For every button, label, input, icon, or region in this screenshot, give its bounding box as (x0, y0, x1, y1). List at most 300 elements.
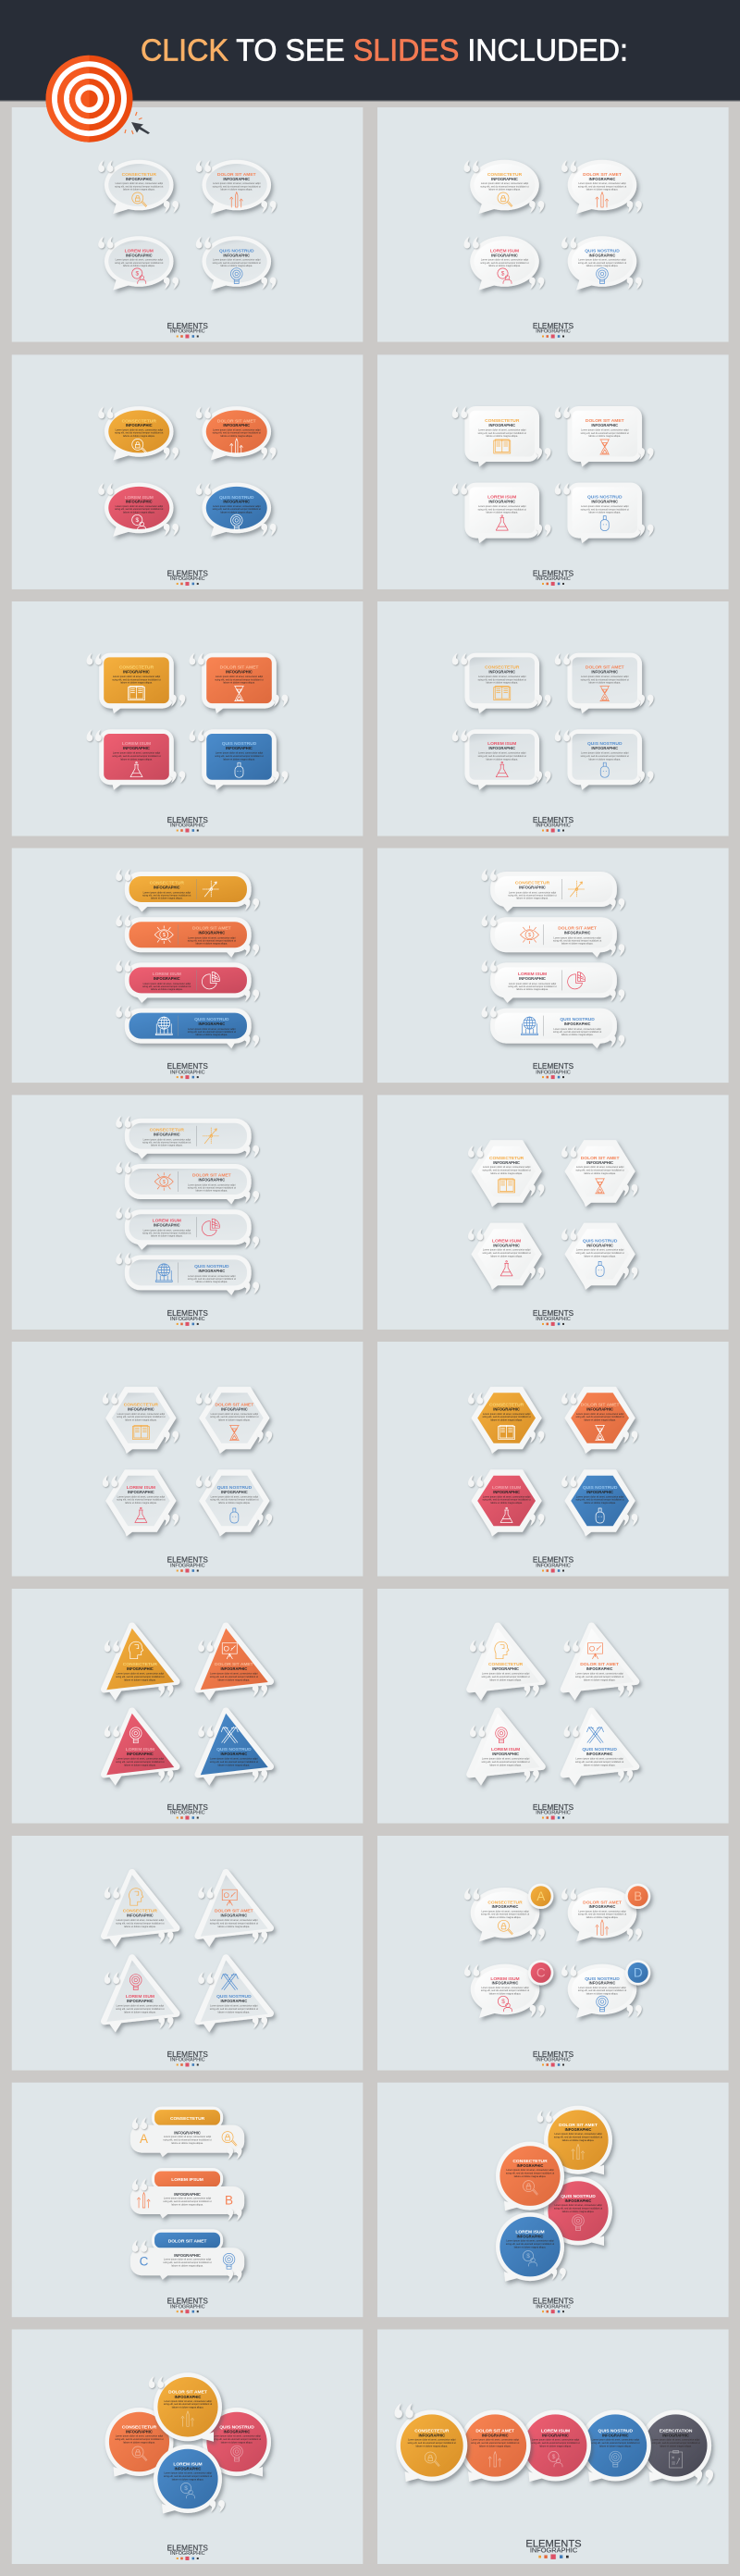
icon: pie (202, 1219, 219, 1236)
text block: labore et dolore magna aliqua. (221, 434, 253, 438)
subheading: INFOGRAPHIC (127, 1752, 154, 1756)
text block: Lorem ipsum dolor sit amet, consectetur adipi (532, 2437, 580, 2441)
text block: scing elit, sed do eiusmod tempor incididunt ut (115, 184, 164, 188)
heading: LOREM ISUM (127, 1485, 155, 1491)
text block: scing elit, sed do eiusmod tempor incididunt ut (581, 507, 629, 511)
icon: arrows (488, 2452, 501, 2467)
bubble: lorem isum (520, 2410, 591, 2482)
icon: money person (132, 268, 146, 283)
text block: labore et dolore magna aliqua. (487, 757, 518, 761)
badge A: A (536, 1889, 545, 1903)
text block: labore et dolore magna aliqua. (125, 1418, 157, 1421)
subheading: INFOGRAPHIC (491, 177, 518, 181)
text block: labore et dolore magna aliqua. (561, 1033, 594, 1036)
text block: Lorem ipsum dolor sit amet, consectetur adipi (483, 1412, 531, 1416)
text block: labore et dolore magna aliqua. (124, 1678, 156, 1682)
pill: consectetur (481, 869, 624, 912)
text block: labore et dolore magna aliqua. (172, 2477, 204, 2481)
panel: white pills (377, 848, 729, 1083)
text block: scing elit, sed do eiusmod tempor incididunt ut (115, 507, 164, 511)
text block: labore et dolore magna aliqua. (489, 1915, 521, 1919)
bubble: lorem isum (98, 483, 179, 537)
icon: money person (132, 514, 146, 530)
icon: money person (498, 1996, 512, 2012)
icon: hourglass (235, 687, 244, 701)
bubble: consectetur (463, 160, 544, 214)
heading: QUIS NOSTRUD (587, 495, 623, 501)
icon: flask (496, 515, 508, 530)
text block: labore et dolore magna aliqua. (584, 1763, 616, 1767)
text block: scing elit, sed do eiusmod tempor incididunt ut (481, 1913, 529, 1916)
opening quote (394, 2403, 413, 2418)
text block: scing elit, sed do eiusmod tempor incididunt ut (478, 431, 526, 435)
heading: QUIS NOSTRUD (216, 1747, 252, 1752)
icon: magnifier (425, 2452, 439, 2467)
triangle: quis nostrud (198, 1958, 270, 2032)
heading: LOREM ISUM (515, 2229, 545, 2235)
text block: scing elit, sed do eiusmod tempor incididunt ut (508, 893, 557, 897)
icon: globe (155, 1264, 172, 1282)
panel: staggered coloured bubbles (377, 2083, 729, 2317)
bubble: dolor sit amet (196, 160, 277, 214)
text block: labore et dolore magna aliqua. (124, 1763, 156, 1767)
bubble: lorem isum (98, 236, 179, 291)
bubble: quis nostrud (561, 236, 642, 291)
text block: labore et dolore magna aliqua. (488, 188, 521, 192)
item: consectetur (130, 2107, 244, 2160)
bubble: consectetur (396, 2410, 467, 2482)
text block: Lorem ipsum dolor sit amet, consectetur adipi (210, 1757, 258, 1761)
logo: INFOGRAPHIC (170, 1070, 205, 1075)
subheading: INFOGRAPHIC (488, 423, 515, 427)
text block: labore et dolore magna aliqua. (584, 1254, 616, 1257)
icon: magnifier (132, 439, 147, 453)
logo: INFOGRAPHIC (170, 2551, 205, 2557)
heading: CONSECTETUR (122, 418, 156, 424)
subheading: INFOGRAPHIC (128, 1490, 154, 1494)
text block: Lorem ipsum dolor sit amet, consectetur adipi (483, 1165, 531, 1169)
text block: Lorem ipsum dolor sit amet, consectetur adipi (576, 1248, 624, 1252)
bubble: consectetur (98, 160, 179, 214)
text block: scing elit, sed do eiusmod tempor incididunt ut (482, 1415, 531, 1418)
text block: labore et dolore magna aliqua. (123, 2440, 155, 2444)
logo: ELEMENTS (167, 1062, 208, 1071)
text block: scing elit, sed do eiusmod tempor incididunt ut (142, 985, 191, 988)
logo: INFOGRAPHIC (170, 329, 205, 335)
text block: Lorem ipsum dolor sit amet, consectetur adipi (143, 1137, 191, 1141)
subheading: INFOGRAPHIC (221, 1999, 247, 2003)
triangle: consectetur (105, 1873, 177, 1947)
logo: INFOGRAPHIC (536, 1317, 571, 1322)
bubble: dolor sit amet (189, 653, 288, 713)
text block: scing elit, sed do eiusmod tempor incididunt ut (408, 2441, 456, 2445)
icon: arrows (596, 192, 609, 207)
heading: CONSECTETUR (515, 880, 550, 886)
text block: labore et dolore magna aliqua. (584, 1501, 616, 1505)
hexagon: lorem isum (468, 1470, 544, 1536)
text block: labore et dolore magna aliqua. (490, 1501, 523, 1505)
icon: target (46, 56, 133, 142)
logo: ELEMENTS (167, 2545, 208, 2552)
icon: book (499, 1425, 515, 1440)
text block: Lorem ipsum dolor sit amet, consectetur adipi (481, 1986, 529, 1989)
text block: labore et dolore magna aliqua. (196, 942, 228, 946)
pill: lorem isum (116, 960, 259, 1003)
hexagon: quis nostrud (561, 1223, 637, 1290)
text block: scing elit, sed do eiusmod tempor incididunt ut (210, 1415, 259, 1418)
text block: labore et dolore magna aliqua. (562, 2138, 594, 2142)
bubble: lorem isum (154, 2445, 222, 2513)
bubble: quis nostrud (203, 2408, 271, 2476)
heading: LOREM ISUM (125, 495, 154, 501)
heading: DOLOR SIT AMET (475, 2428, 514, 2434)
icon: globe (522, 1017, 538, 1035)
closing quote (551, 2268, 566, 2280)
text block: Lorem ipsum dolor sit amet, consectetur adipi (213, 181, 261, 185)
icon: magnifier (498, 192, 512, 207)
subheading: INFOGRAPHIC (221, 1406, 248, 1412)
text block: scing elit, sed do eiusmod tempor incididunt ut (210, 1498, 259, 1502)
logo: ELEMENTS (167, 1556, 208, 1564)
subheading: INFOGRAPHIC (175, 2467, 201, 2471)
logo (167, 2050, 208, 2067)
text block: scing elit, sed do eiusmod tempor incididunt ut (575, 1415, 624, 1418)
text block: labore et dolore magna aliqua. (125, 1501, 157, 1505)
pill: dolor sit amet (116, 914, 259, 958)
logo: INFOGRAPHIC (536, 1564, 571, 1569)
text block: Lorem ipsum dolor sit amet, consectetur adipi (164, 2258, 212, 2261)
heading: LOREM ISUM (153, 972, 181, 977)
heading: QUIS NOSTRUD (585, 248, 620, 254)
hexagon: quis nostrud (196, 1470, 272, 1536)
text block: Lorem ipsum dolor sit amet, consectetur adipi (213, 257, 261, 261)
bubble: quis nostrud (555, 729, 654, 790)
panel: coloured triangles (12, 1589, 363, 1823)
subheading: INFOGRAPHIC (491, 253, 518, 257)
heading: CONSECTETUR (414, 2428, 450, 2434)
text block: Lorem ipsum dolor sit amet, consectetur adipi (113, 675, 161, 678)
heading: DOLOR SIT AMET (583, 172, 622, 178)
subheading: INFOGRAPHIC (492, 1752, 519, 1756)
text block: scing elit, sed do eiusmod tempor incididunt ut (210, 1760, 258, 1764)
panel: coloured pills (12, 848, 363, 1083)
icon: book (128, 687, 144, 700)
pill: lorem isum (116, 1207, 259, 1250)
icon: hourglass (600, 440, 610, 454)
logo: ELEMENTS (167, 2297, 208, 2306)
text block: labore et dolore magna aliqua. (489, 1678, 522, 1682)
icon: pie (568, 972, 586, 989)
subheading: INFOGRAPHIC (154, 1132, 180, 1136)
bubble: quis nostrud (544, 2176, 612, 2246)
logo: INFOGRAPHIC (170, 1564, 205, 1569)
text block: Lorem ipsum dolor sit amet, consectetur adipi (576, 1412, 624, 1416)
text block: labore et dolore magna aliqua. (489, 1991, 521, 1995)
heading: CONSECTETUR (123, 1662, 157, 1667)
text block: scing elit, sed do eiusmod tempor incididunt ut (116, 1675, 165, 1678)
heading: QUIS NOSTRUD (585, 1976, 620, 1982)
bubble: lorem isum (463, 236, 544, 291)
subheading: INFOGRAPHIC (226, 670, 253, 675)
text block: labore et dolore magna aliqua. (123, 434, 155, 438)
logo: ELEMENTS (525, 2539, 582, 2550)
icon: head (130, 1641, 143, 1659)
text block: labore et dolore magna aliqua. (514, 2245, 546, 2248)
subheading: INFOGRAPHIC (586, 1490, 613, 1494)
text block: scing elit, sed do eiusmod tempor incididunt ut (581, 677, 629, 681)
text block: Lorem ipsum dolor sit amet, consectetur adipi (216, 751, 264, 755)
text block: Lorem ipsum dolor sit amet, consectetur adipi (481, 1909, 529, 1913)
text block: Lorem ipsum dolor sit amet, consectetur adipi (478, 751, 526, 755)
bubble: consectetur (105, 2408, 174, 2476)
text block: scing elit, sed do eiusmod tempor incididunt ut (215, 677, 264, 681)
subheading: INFOGRAPHIC (591, 500, 618, 504)
text block: Lorem ipsum dolor sit amet, consectetur adipi (210, 1918, 258, 1922)
heading: CONSECTETUR (489, 1403, 524, 1408)
logo (167, 816, 208, 833)
subheading: INFOGRAPHIC (488, 500, 515, 504)
bubble: dolor sit amet (154, 2372, 222, 2442)
logo (533, 1062, 574, 1079)
heading: LOREM ISUM (490, 248, 519, 254)
icon: magnifier (222, 2132, 237, 2146)
text block: scing elit, sed do eiusmod tempor incididunt ut (142, 893, 191, 897)
heading: LOREM ISUM (487, 741, 516, 747)
text block: Lorem ipsum dolor sit amet, consectetur adipi (506, 2239, 554, 2243)
text block: scing elit, sed do eiusmod tempor incididunt ut (213, 2437, 261, 2441)
subheading: INFOGRAPHIC (127, 1999, 154, 2003)
text block: labore et dolore magna aliqua. (586, 1915, 618, 1919)
text block: Lorem ipsum dolor sit amet, consectetur adipi (581, 675, 629, 678)
heading: QUIS NOSTRUD (583, 1485, 618, 1491)
panel: ring ellipse bubbles (12, 107, 363, 342)
text block: scing elit, sed do eiusmod tempor incididunt ut (115, 261, 164, 265)
heading: DOLOR SIT AMET (215, 1909, 253, 1914)
heading: LOREM ISUM (518, 972, 547, 977)
bubble: quis nostrud (196, 483, 277, 537)
subheading: INFOGRAPHIC (223, 177, 250, 181)
subheading: INFOGRAPHIC (123, 746, 150, 750)
hexagon: dolor sit amet (561, 1141, 637, 1207)
heading: LOREM ISUM (487, 495, 516, 501)
text block: Lorem ipsum dolor sit amet, consectetur adipi (213, 504, 261, 508)
heading: LOREM ISUM (492, 1485, 521, 1491)
icon: head (495, 1641, 509, 1659)
heading: DOLOR SIT AMET (168, 2238, 206, 2244)
text block: scing elit, sed do eiusmod tempor incididunt ut (164, 2474, 212, 2478)
text block: Lorem ipsum dolor sit amet, consectetur adipi (554, 2203, 602, 2207)
hexagon: quis nostrud (561, 1470, 637, 1536)
logo: ELEMENTS (167, 1803, 208, 1812)
subheading: INFOGRAPHIC (602, 2434, 629, 2437)
text block: labore et dolore magna aliqua. (562, 2210, 594, 2213)
panel: ring pills (12, 1095, 363, 1330)
icon: flask (496, 762, 508, 777)
text block: Lorem ipsum dolor sit amet, consectetur adipi (113, 751, 161, 755)
icon: crossing arrows (221, 1974, 238, 1989)
text block: scing elit, sed do eiusmod tempor incididunt ut (115, 2437, 164, 2441)
text block: scing elit, sed do eiusmod tempor incididunt ut (115, 431, 164, 435)
text block: scing elit, sed do eiusmod tempor incididunt ut (554, 2136, 602, 2139)
heading: QUIS NOSTRUD (219, 2424, 254, 2430)
icon: bottle (230, 1508, 239, 1523)
text block: Lorem ipsum dolor sit amet, consectetur adipi (116, 504, 163, 508)
icon: eye (520, 926, 538, 944)
text block: labore et dolore magna aliqua. (490, 1171, 523, 1175)
text block: labore et dolore magna aliqua. (120, 757, 153, 761)
text block: scing elit, sed do eiusmod tempor incididunt ut (142, 1140, 191, 1144)
subheading: INFOGRAPHIC (127, 1666, 154, 1671)
heading: CONSECTETUR (512, 2159, 548, 2164)
subheading: INFOGRAPHIC (586, 1406, 613, 1412)
text block: Lorem ipsum dolor sit amet, consectetur adipi (188, 1027, 236, 1031)
bubble: lorem isum (452, 483, 551, 543)
heading: DOLOR SIT AMET (558, 926, 597, 932)
subheading: INFOGRAPHIC (589, 253, 615, 257)
badge D: D (634, 1966, 643, 1980)
subheading: INFOGRAPHIC (223, 423, 250, 427)
text block: labore et dolore magna aliqua. (488, 264, 521, 267)
subheading: INFOGRAPHIC (199, 931, 225, 935)
triangle: quis nostrud (198, 1711, 270, 1786)
subheading: INFOGRAPHIC (564, 931, 590, 935)
heading: DOLOR SIT AMET (192, 926, 231, 932)
badge C: C (536, 1966, 546, 1980)
text block: labore et dolore magna aliqua. (539, 2444, 572, 2447)
text block: Lorem ipsum dolor sit amet, consectetur adipi (188, 1274, 236, 1278)
text block: labore et dolore magna aliqua. (584, 1171, 616, 1175)
text block: scing elit, sed do eiusmod tempor incididunt ut (116, 1922, 165, 1926)
panel: coloured ellipse bubbles (12, 354, 363, 589)
logo (525, 2539, 582, 2559)
text block: scing elit, sed do eiusmod tempor incididunt ut (581, 754, 629, 758)
heading: DOLOR SIT AMET (216, 1403, 253, 1408)
logo: INFOGRAPHIC (536, 1070, 571, 1075)
text block: scing elit, sed do eiusmod tempor incididunt ut (578, 1988, 626, 1992)
text block: Lorem ipsum dolor sit amet, consectetur adipi (592, 2437, 639, 2441)
pill: quis nostrud (116, 1252, 259, 1295)
subheading: INFOGRAPHIC (517, 2163, 543, 2168)
text block: Lorem ipsum dolor sit amet, consectetur adipi (408, 2437, 456, 2441)
heading: DOLOR SIT AMET (192, 1173, 231, 1179)
heading: CONSECTETUR (489, 1156, 524, 1161)
heading: QUIS NOSTRUD (598, 2428, 634, 2434)
heading: CONSECTETUR (485, 418, 520, 424)
icon: money person (180, 2483, 194, 2498)
text block: Lorem ipsum dolor sit amet, consectetur adipi (211, 1412, 258, 1416)
icon: magnifier (132, 192, 147, 207)
logo: INFOGRAPHIC (536, 329, 571, 335)
text block: labore et dolore magna aliqua. (218, 2010, 250, 2013)
bubble: dolor sit amet (555, 653, 654, 713)
logo (167, 2545, 208, 2560)
subheading: INFOGRAPHIC (128, 1406, 154, 1412)
subheading: INFOGRAPHIC (223, 500, 250, 504)
heading: DOLOR SIT AMET (215, 1662, 253, 1667)
heading: LOREM ISUM (153, 1219, 181, 1224)
item: dolor sit amet (130, 2229, 244, 2282)
bubble: exercitation (640, 2410, 711, 2482)
triangle: consectetur (470, 1626, 542, 1701)
text block: scing elit, sed do eiusmod tempor incididunt ut (482, 1251, 531, 1255)
bubble: dolor sit amet (544, 2106, 612, 2174)
text block: Lorem ipsum dolor sit amet, consectetur adipi (509, 982, 557, 985)
text block: Lorem ipsum dolor sit amet, consectetur adipi (481, 181, 529, 185)
pill: consectetur (116, 1116, 259, 1158)
subheading: INFOGRAPHIC (174, 2131, 201, 2136)
text block: labore et dolore magna aliqua. (120, 681, 153, 685)
logo: ELEMENTS (533, 1556, 574, 1564)
text block: labore et dolore magna aliqua. (599, 2444, 632, 2447)
text block: scing elit, sed do eiusmod tempor incididunt ut (215, 754, 264, 758)
heading: QUIS NOSTRUD (216, 1994, 252, 2000)
text block: scing elit, sed do eiusmod tempor incididunt ut (651, 2441, 700, 2445)
hexagon: dolor sit amet (196, 1387, 272, 1454)
text block: scing elit, sed do eiusmod tempor incididunt ut (481, 1760, 530, 1764)
subheading: INFOGRAPHIC (492, 1904, 518, 1909)
text block: labore et dolore magna aliqua. (221, 264, 253, 267)
hexagon: lorem isum (103, 1470, 179, 1536)
bubble: dolor sit amet (555, 406, 654, 466)
logo: ELEMENTS (533, 1062, 574, 1071)
subheading: INFOGRAPHIC (488, 670, 515, 675)
icon: chart (568, 881, 585, 898)
heading: QUIS NOSTRUD (222, 741, 257, 747)
text block: Lorem ipsum dolor sit amet, consectetur adipi (581, 427, 629, 431)
subheading: INFOGRAPHIC (199, 1022, 225, 1026)
bubble: consectetur (496, 2142, 564, 2211)
text block: labore et dolore magna aliqua. (589, 757, 621, 761)
text block: scing elit, sed do eiusmod tempor incididunt ut (531, 2441, 580, 2445)
icon: arrows (230, 192, 242, 207)
subheading: INFOGRAPHIC (565, 2127, 591, 2132)
icon: bulb (597, 1996, 608, 2012)
icon: bottle (596, 1261, 604, 1276)
icon: crossing arrows (221, 1727, 238, 1743)
text block: labore et dolore magna aliqua. (589, 681, 621, 685)
text block: scing elit, sed do eiusmod tempor incididunt ut (164, 2402, 212, 2406)
panel: ring hexagons (12, 1342, 363, 1577)
panel: row of five bubbles (377, 2330, 729, 2564)
text block: Lorem ipsum dolor sit amet, consectetur adipi (506, 2168, 554, 2172)
heading: LOREM ISUM (173, 2461, 203, 2467)
text block: scing elit, sed do eiusmod tempor incididunt ut (478, 754, 526, 758)
icon: hourglass (600, 687, 610, 701)
heading: QUIS NOSTRUD (587, 741, 623, 747)
icon: arrows (596, 1920, 609, 1935)
icon: chart (203, 1128, 219, 1145)
heading: CONSECTETUR (488, 1662, 524, 1667)
icon: magnifier (524, 2181, 537, 2195)
text block: scing elit, sed do eiusmod tempor incididunt ut (481, 1988, 529, 1992)
subheading: INFOGRAPHIC (519, 885, 546, 889)
icon: bulb (231, 2446, 242, 2461)
text block: scing elit, sed do eiusmod tempor incididunt ut (117, 1415, 166, 1418)
text block: scing elit, sed do eiusmod tempor incididunt ut (210, 1675, 258, 1678)
text block: Lorem ipsum dolor sit amet, consectetur adipi (117, 1412, 165, 1416)
subheading: INFOGRAPHIC (586, 1752, 612, 1756)
text block: scing elit, sed do eiusmod tempor incididunt ut (553, 1030, 602, 1034)
logo: ELEMENTS (167, 569, 208, 577)
text block: labore et dolore magna aliqua. (489, 1763, 522, 1767)
heading: DOLOR SIT AMET (580, 1662, 619, 1667)
heading: DOLOR SIT AMET (559, 2123, 598, 2128)
logo (533, 1803, 574, 1819)
subheading: INFOGRAPHIC (492, 1981, 518, 1986)
bubble: consectetur (86, 653, 185, 713)
opening quote (537, 2111, 552, 2123)
text block: Lorem ipsum dolor sit amet, consectetur adipi (578, 257, 626, 261)
